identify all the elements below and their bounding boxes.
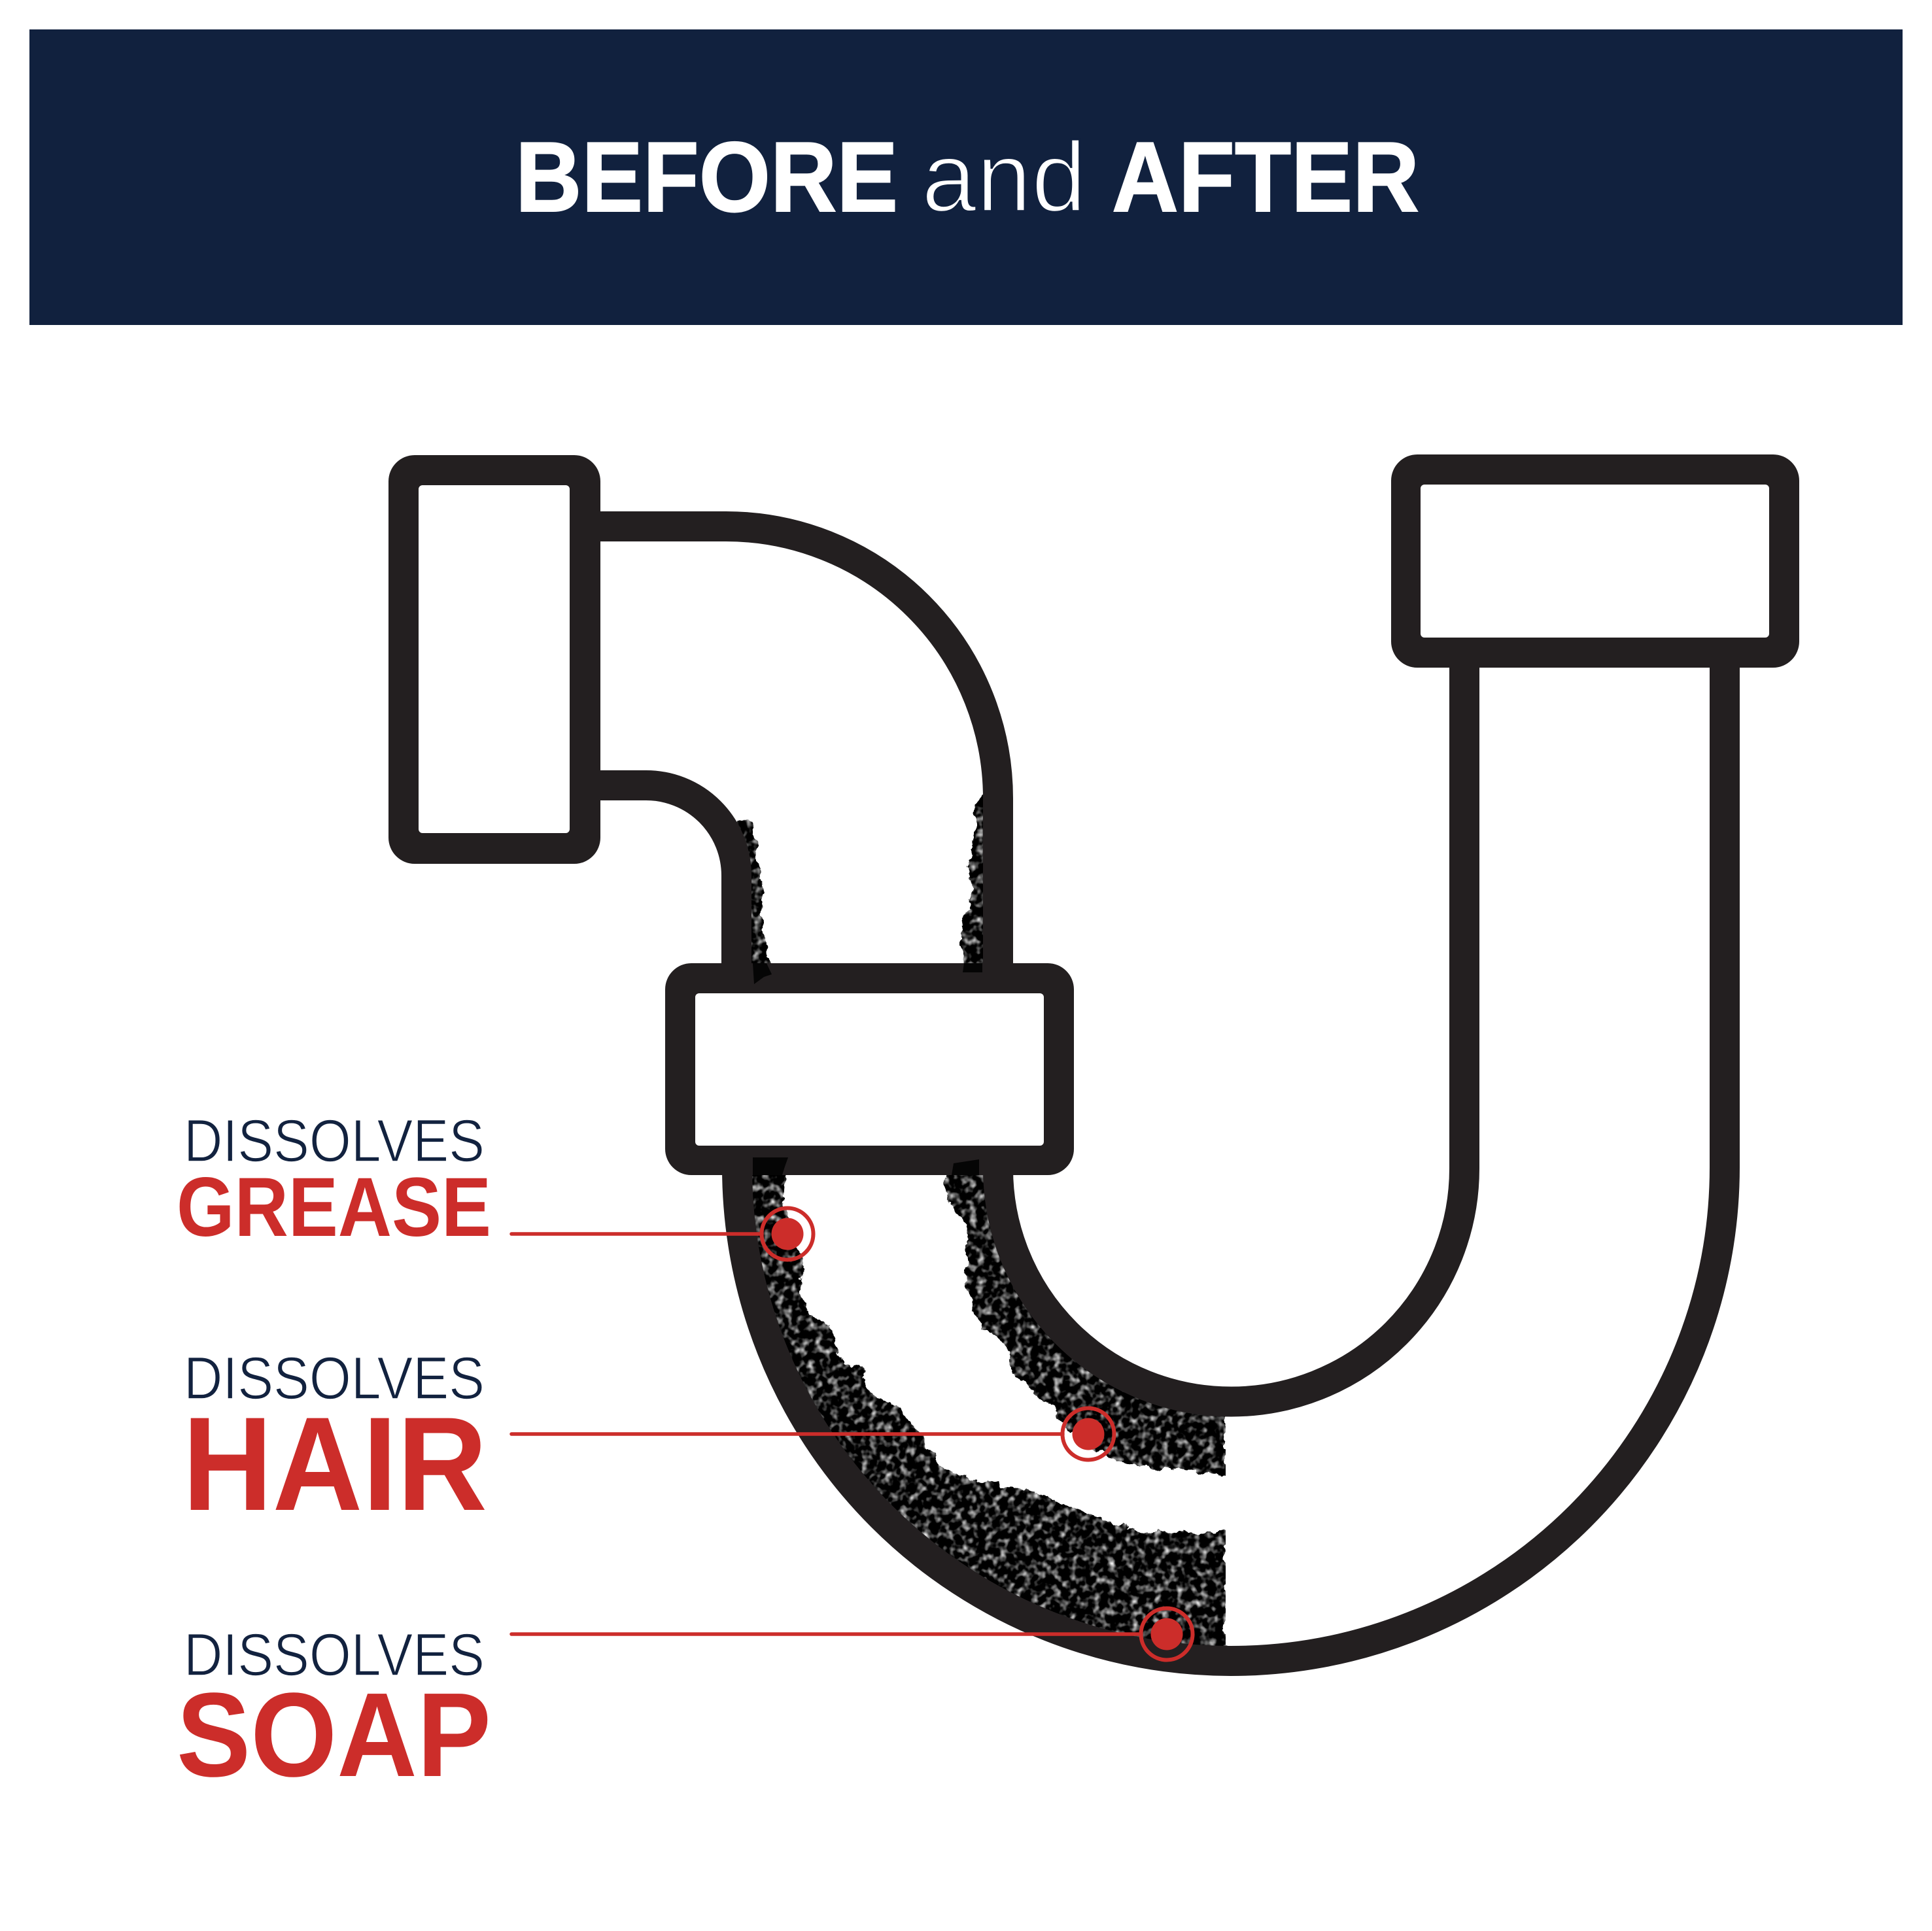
title: and [922, 122, 1086, 233]
left flange [388, 455, 600, 864]
label: dissolves hair: DISSOLVES [184, 1345, 485, 1412]
soap buildup clip edge [1226, 1417, 1235, 1645]
title: AFTER [1112, 122, 1419, 233]
label: dissolves grease: DISSOLVES [184, 1108, 485, 1174]
lower bend inner wall [998, 654, 1464, 1402]
upper elbow inner wall [589, 785, 736, 974]
leader line and marker [511, 1208, 814, 1259]
label: dissolves grease [177, 1108, 491, 1254]
right flange [1391, 454, 1799, 668]
label: dissolves soap: SOAP [177, 1667, 491, 1802]
upper elbow outer wall [589, 526, 998, 974]
clog buildup inside pipe [739, 794, 1226, 1654]
title: BEFORE [515, 122, 898, 233]
label: dissolves grease: GREASE [177, 1161, 491, 1254]
middle coupling [665, 963, 1074, 1175]
leader line and marker [511, 1609, 1193, 1660]
label: dissolves soap: DISSOLVES [184, 1622, 485, 1688]
leader line and marker [511, 1409, 1114, 1460]
callout: soap [177, 1609, 1193, 1802]
lower bend outer wall [737, 654, 1725, 1661]
callout: grease [177, 1108, 814, 1259]
label: dissolves hair: HAIR [182, 1390, 487, 1539]
p-trap pipe [589, 526, 1725, 1661]
title [515, 122, 1419, 233]
buildup overlapping coupling [753, 963, 982, 1175]
callout: hair [182, 1345, 1114, 1539]
header banner [29, 29, 1903, 325]
